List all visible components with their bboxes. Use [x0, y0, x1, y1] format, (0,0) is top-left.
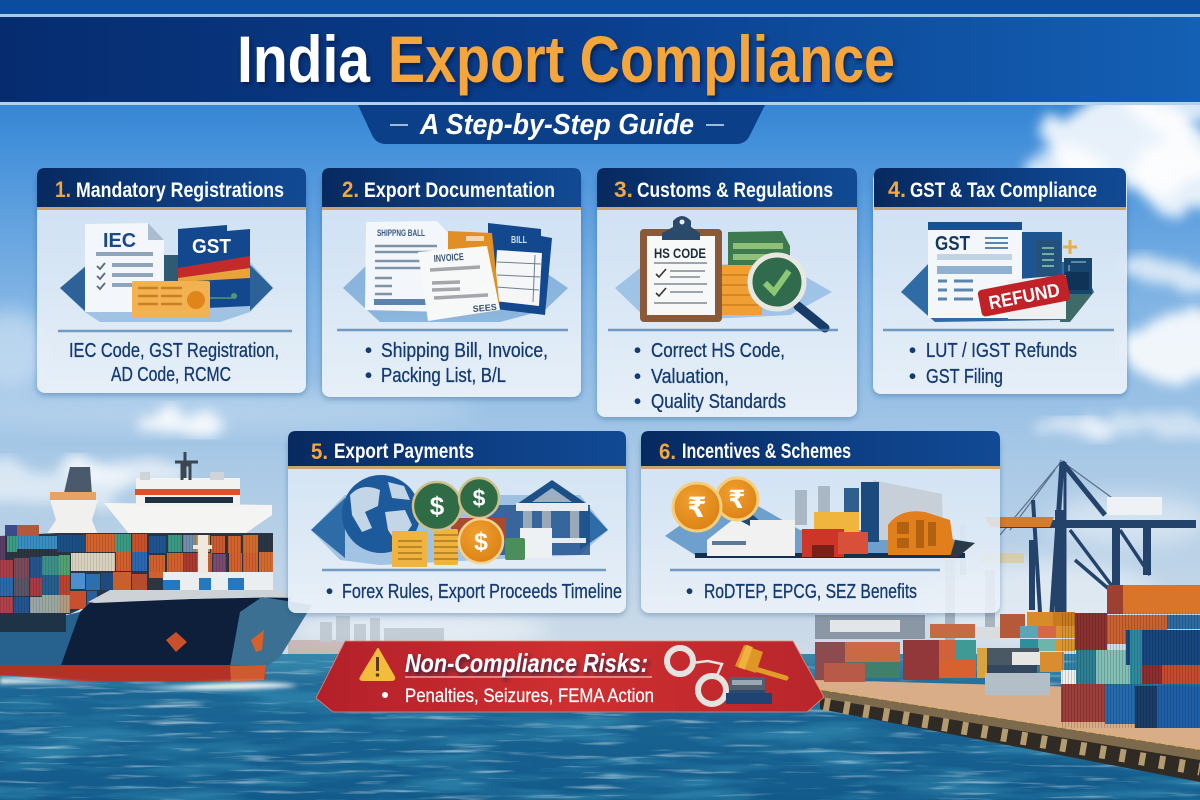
- icon: gavel and block: [726, 645, 786, 704]
- panel 3 header: [597, 168, 857, 210]
- panel 4 text: GST Filing: [926, 366, 1003, 388]
- icon: IEC document, GST folder and ID card: IEC: [103, 230, 136, 252]
- icon: shipping bill, invoice and bill documents: INVOICE: [433, 252, 464, 265]
- risk text: Penalties, Seizures, FEMA Action: [405, 686, 654, 707]
- panel 3 header: 3.: [614, 177, 633, 202]
- hull details: [166, 630, 264, 652]
- panel 6 header: 6.: [659, 439, 676, 464]
- panel 4 header: 4.: [888, 177, 906, 202]
- red boot stripe: [0, 665, 266, 682]
- panel 3 text: •: [634, 340, 641, 362]
- icon: IEC document, GST folder and ID card: GST: [192, 236, 231, 258]
- icon: GST form with refund stamp: [901, 222, 1094, 322]
- panel 3 text: Correct HS Code,: [651, 340, 785, 362]
- panel 2 header: Export Documentation: [364, 179, 555, 202]
- hull dark navy section: [60, 597, 292, 668]
- panel 1 text: [69, 340, 279, 386]
- panel 3 text: •: [634, 366, 641, 388]
- bow wave: [0, 678, 298, 690]
- panel 5 text: Forex Rules, Export Proceeds Timeline: [342, 581, 622, 603]
- title: [237, 22, 895, 96]
- panel 4 header: GST & Tax Compliance: [910, 179, 1097, 202]
- icon: handcuffs: [667, 648, 726, 704]
- icon: shipping bill, invoice and bill documents: BILL: [511, 235, 527, 246]
- panel 6: incentives and schemes: [641, 431, 1000, 613]
- icon: rupee coins, factory and cargo: ₹: [728, 486, 746, 514]
- large container stacks: [1061, 585, 1200, 728]
- panel 2 header: [322, 168, 581, 210]
- risk heading: Non-Compliance Risks:: [405, 648, 648, 678]
- panel 3: customs and regulations: [597, 168, 857, 417]
- icon: GST form with refund stamp: REFUND: [987, 280, 1062, 314]
- risk banner: [316, 641, 824, 712]
- hull left blue section: [0, 612, 80, 668]
- panel 2: export documentation: [322, 168, 581, 397]
- dock ground: [815, 680, 1200, 752]
- bridge superstructure: [104, 452, 272, 535]
- icon: shipping bill, invoice and bill documents: SEES: [472, 302, 497, 314]
- panel 2 text: [365, 340, 548, 387]
- panel 3 header: Customs & Regulations: [637, 179, 833, 202]
- port with cranes and containers: [815, 460, 1200, 782]
- icon: warning triangle: [360, 649, 394, 680]
- panel 3 text: [634, 340, 786, 413]
- panel 1 header: Mandatory Registrations: [76, 179, 284, 202]
- panel 1 text: IEC Code, GST Registration,: [69, 340, 279, 362]
- icon: rupee coins, factory and cargo: [665, 478, 975, 558]
- panel 2 text: Packing List, B/L: [381, 365, 506, 387]
- panel 2 header: 2.: [342, 177, 359, 202]
- icon: IEC document, GST folder and ID card: [60, 223, 273, 322]
- panel 4 text: [909, 340, 1077, 388]
- panel 6 text: •: [686, 581, 693, 603]
- title: Export Compliance: [388, 22, 895, 96]
- panel 6 header: [641, 431, 1000, 469]
- gantry crane: [985, 460, 1196, 612]
- background: clouds: [0, 65, 1200, 648]
- panel 4: GST and tax compliance: [873, 168, 1127, 394]
- panel 6 header: Incentives & Schemes: [682, 440, 851, 463]
- deck containers: [0, 525, 273, 614]
- panel 3 text: Quality Standards: [651, 391, 786, 413]
- container ship: [0, 452, 312, 690]
- panel 4 text: •: [909, 366, 916, 388]
- background: sea: [0, 654, 1200, 800]
- far container rows: [815, 612, 1086, 695]
- panel 2 text: •: [365, 365, 372, 387]
- icon: globe, coins and bank: $: [474, 528, 488, 556]
- bow slate section: [230, 597, 312, 667]
- panel 6 text: RoDTEP, EPCG, SEZ Benefits: [704, 581, 917, 603]
- subtitle tab: [358, 105, 765, 144]
- icon: HS code clipboard and magnifier: HS CODE: [654, 245, 706, 261]
- panel 1 text: AD Code, RCMC: [111, 364, 231, 386]
- white crane on deck: [193, 535, 212, 573]
- header band: [0, 0, 1200, 105]
- title: India: [237, 22, 371, 96]
- icon: globe, coins and bank: $: [473, 485, 486, 511]
- icon: shipping bill, invoice and bill documents: SHIPPNG BALL: [377, 228, 425, 238]
- panel 4 text: LUT / IGST Refunds: [926, 340, 1077, 362]
- panel 5 header: 5.: [311, 439, 328, 464]
- hazy rear crane: [945, 525, 1024, 640]
- icon: globe, coins and bank: $: [430, 491, 445, 521]
- panel 3 text: Valuation,: [651, 366, 729, 388]
- icon: HS code clipboard and magnifier: [615, 216, 832, 328]
- panel 1: mandatory registrations: [37, 168, 306, 393]
- panel 5 text: •: [326, 581, 333, 603]
- quay wall: [820, 689, 1200, 782]
- icon: GST form with refund stamp: GST: [935, 233, 970, 255]
- rear funnel and tower: [46, 467, 98, 535]
- panel 2 text: Shipping Bill, Invoice,: [381, 340, 548, 362]
- panel 5: export payments: [288, 431, 626, 613]
- icon: globe, coins and bank: [311, 475, 608, 567]
- icon: rupee coins, factory and cargo: ₹: [687, 492, 707, 523]
- subtitle tab: A Step-by-Step Guide: [419, 109, 694, 141]
- panel 1 header: [37, 168, 306, 210]
- background: distant skyline: [288, 616, 444, 654]
- panel 5 header: [288, 431, 626, 469]
- panel 5 header: Export Payments: [334, 440, 474, 463]
- deck rim: [88, 590, 300, 603]
- panel 1 header: 1.: [55, 177, 71, 202]
- panel 2 text: •: [365, 340, 372, 362]
- panel 4 text: •: [909, 340, 916, 362]
- panel 4 header: [874, 168, 1126, 210]
- icon: shipping bill, invoice and bill documents: [343, 221, 568, 322]
- panel 3 text: •: [634, 391, 641, 413]
